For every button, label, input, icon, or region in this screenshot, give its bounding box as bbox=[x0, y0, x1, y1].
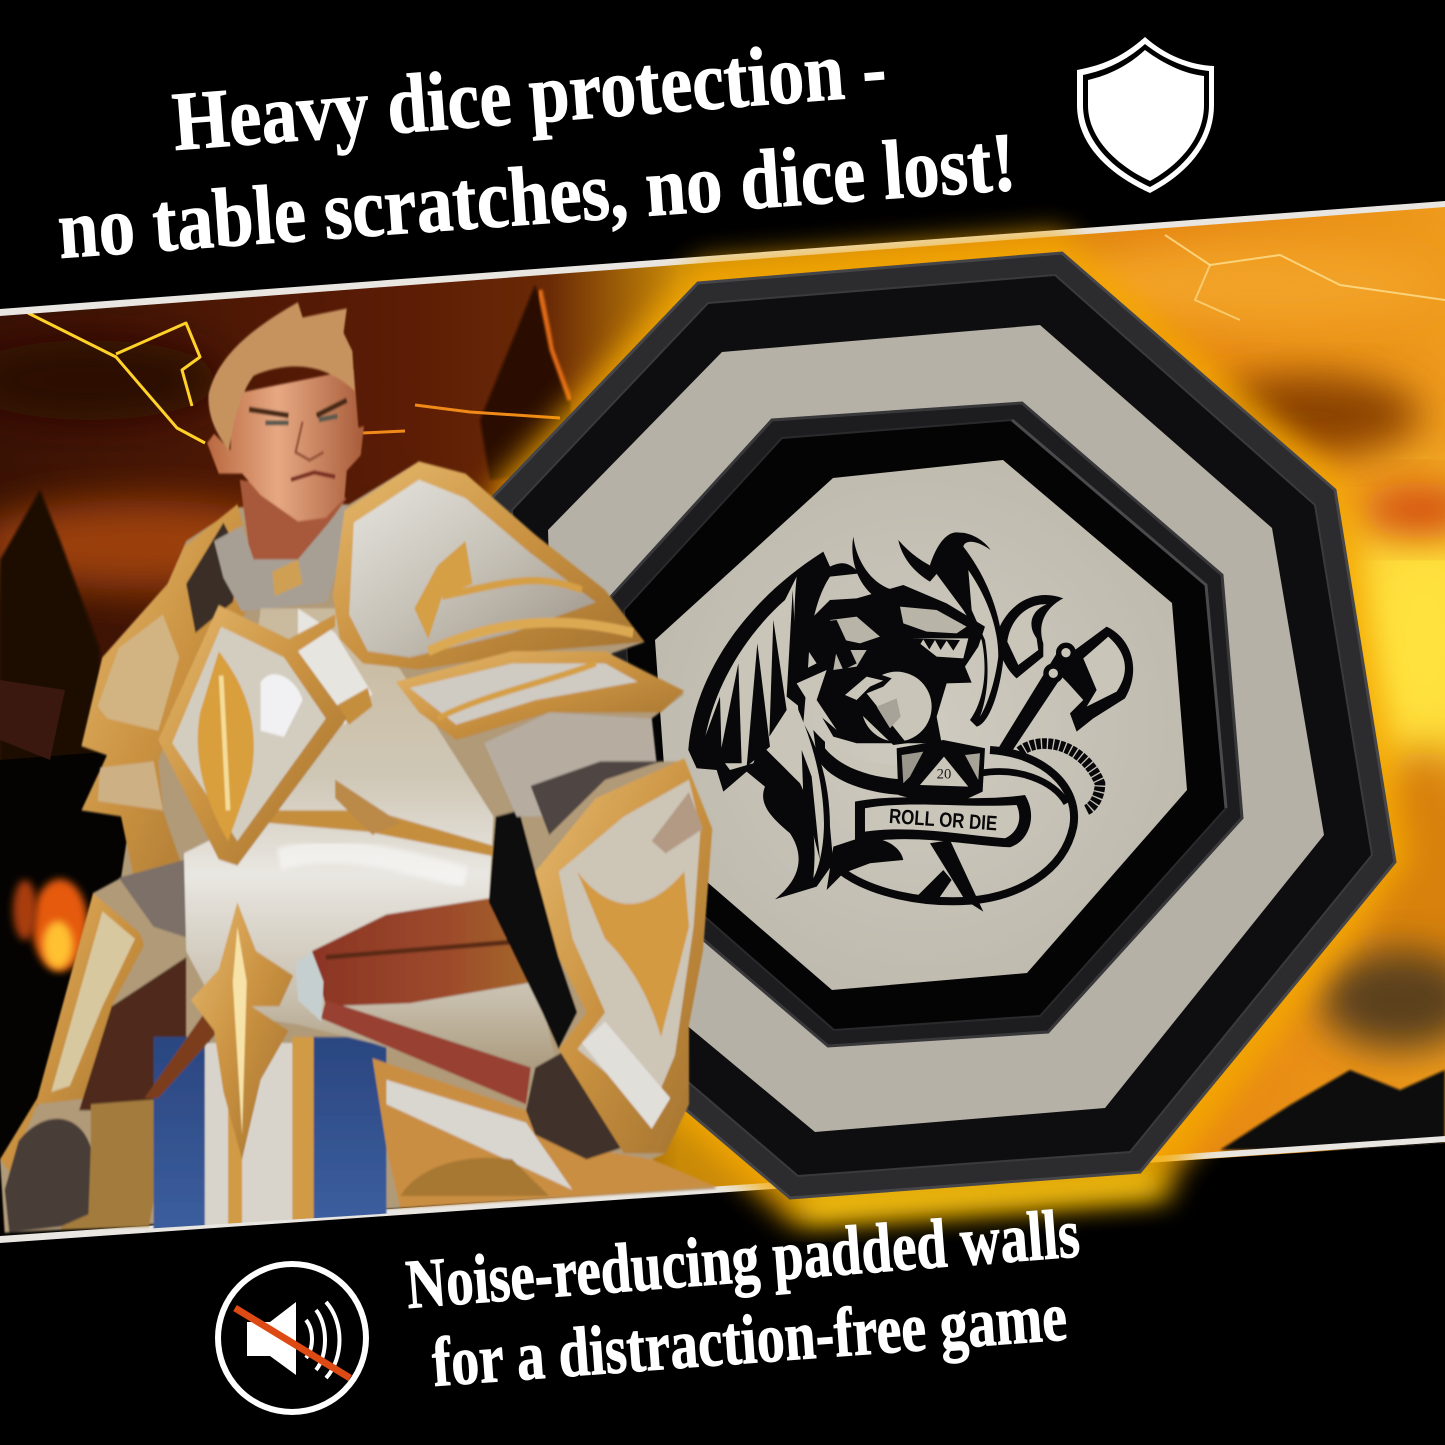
ROLL OR DIE banner: ROLL OR DIE bbox=[888, 805, 998, 835]
horns bbox=[852, 537, 940, 602]
icon: muted speaker bbox=[218, 1264, 366, 1412]
collar bbox=[214, 504, 354, 611]
d20 die: 20 bbox=[937, 767, 951, 783]
inner tray wall bbox=[608, 403, 1242, 1046]
inner tray felt bbox=[655, 460, 1187, 990]
chest scarf sweep bbox=[813, 730, 902, 795]
neck bbox=[240, 480, 347, 565]
heading: bottom text: for a distraction-free game bbox=[430, 1279, 1069, 1402]
d20 die bbox=[897, 740, 985, 808]
belt bbox=[312, 896, 535, 1104]
forearm gauntlet bbox=[535, 758, 712, 1153]
head bbox=[207, 302, 364, 521]
mountains bbox=[0, 285, 575, 1240]
fantasy landscape background band bbox=[0, 200, 1445, 1250]
chest plate bbox=[158, 605, 347, 865]
heading: bottom text: Noise-reducing padded walls bbox=[403, 1195, 1082, 1324]
felt floor of outer tray bbox=[548, 325, 1324, 1132]
lightning bbox=[28, 235, 1445, 443]
hand bbox=[526, 1049, 624, 1159]
upper arm plates bbox=[396, 651, 684, 835]
heading: top text: Heavy dice protection - bbox=[169, 21, 889, 169]
wing bbox=[688, 552, 860, 899]
yellow glow around tray bbox=[490, 232, 1410, 1222]
far arm bbox=[0, 893, 186, 1233]
robe and skirt bbox=[144, 1012, 386, 1233]
pentagram bbox=[917, 840, 983, 912]
central gold ornament bbox=[191, 902, 324, 1159]
heading: top text bbox=[55, 21, 1019, 277]
icon: shield bbox=[1077, 37, 1214, 193]
moon circle bbox=[862, 672, 932, 742]
octagonal dice tray bbox=[490, 253, 1395, 1198]
face bbox=[207, 370, 364, 521]
dragon head details bbox=[797, 607, 968, 730]
claw with sword bbox=[822, 620, 907, 745]
right pauldron bbox=[333, 461, 645, 670]
heading: bottom text bbox=[403, 1195, 1082, 1402]
gap between torso and arm bbox=[489, 810, 577, 1049]
tray outer wall bbox=[490, 253, 1395, 1198]
lower tabard bbox=[372, 1058, 717, 1208]
heading: top text: no table scratches, no dice lost! bbox=[55, 116, 1019, 277]
dragon body and neck bbox=[790, 585, 985, 743]
battle axe bbox=[998, 595, 1133, 752]
torso plate bbox=[184, 608, 559, 1092]
mouth bbox=[291, 472, 335, 480]
white band edges bbox=[0, 201, 1445, 1243]
left pauldron bbox=[81, 504, 261, 939]
fire bbox=[13, 879, 88, 971]
dragon emblem printed on felt bbox=[688, 532, 1133, 912]
brows and eyes bbox=[249, 400, 347, 416]
hair bbox=[208, 302, 355, 450]
base silhouette bbox=[0, 461, 717, 1233]
right wing tip behind head bbox=[930, 532, 1003, 727]
nose bbox=[296, 422, 324, 460]
knight illustration bbox=[0, 302, 717, 1233]
ROLL OR DIE banner bbox=[827, 795, 1031, 890]
serpent tail ring bbox=[840, 744, 1100, 901]
